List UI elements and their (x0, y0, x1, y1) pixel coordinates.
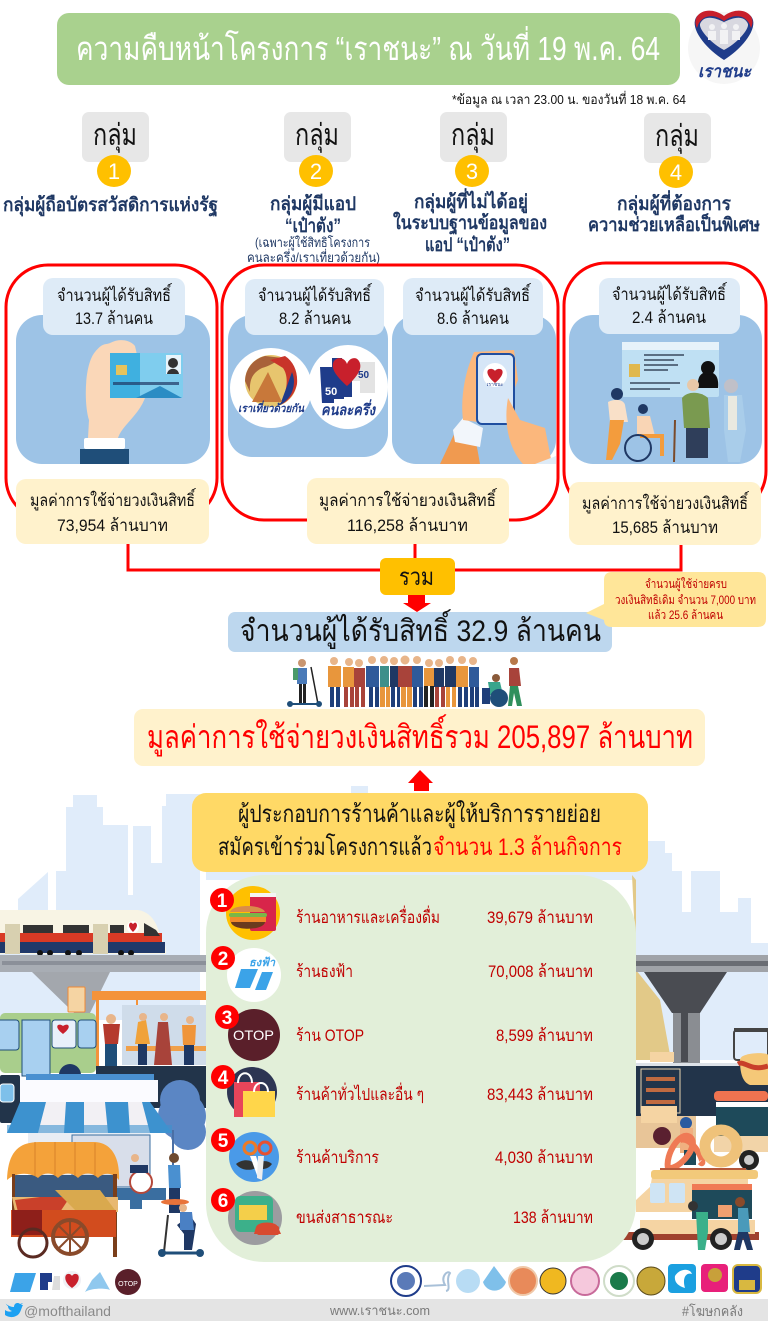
icon: Khon La Khrueng logo: 50 (358, 370, 370, 381)
retail operators box: ผู้ประกอบการร้านค้าและผู้ให้บริการรายย่อย (238, 800, 601, 829)
row 5: services: ร้านค้าบริการ (296, 1148, 379, 1167)
callout: full spenders: จำนวนผู้ใช้จ่ายครบ (645, 577, 727, 592)
group 3 header: 3 (466, 159, 478, 184)
row 1: food and drink: ร้านอาหารและเครื่องดื่ม (296, 905, 440, 927)
row 1: food and drink (210, 886, 593, 940)
group 4 header: กลุ่ม (655, 120, 699, 155)
recipients label (43, 278, 185, 335)
row 4: general stores: ร้านค้าทั่วไปและอื่น ๆ (296, 1082, 424, 1104)
icon: hand holding welfare card (80, 340, 183, 464)
row 3: OTOP: 8,599 ล้านบาท (496, 1026, 593, 1045)
total recipients box: จำนวนผู้ได้รับสิทธิ์ 32.9 ล้านคน (240, 609, 601, 649)
recipients label group 3: จำนวนผู้ได้รับสิทธิ์ (415, 283, 532, 306)
panel: group 4 (564, 263, 766, 545)
recipients label: จำนวนผู้ได้รับสิทธิ์ (57, 283, 173, 306)
illustration: elevated train and track (0, 910, 206, 1013)
spending label (16, 479, 209, 544)
icon: Rao Chana logo: เราชนะ (698, 62, 753, 81)
icon: hand holding phone with app (440, 350, 556, 464)
group 2 header: 2 (310, 159, 322, 184)
connector lines to total (128, 540, 681, 570)
spending label: 116,258 ล้านบาท (347, 516, 468, 535)
spending label: มูลค่าการใช้จ่ายวงเงินสิทธิ์ (30, 488, 197, 511)
group 1 header: กลุ่ม (93, 119, 137, 154)
retail operators box: สมัครเข้าร่วมโครงการแล้ว (218, 833, 432, 861)
row 1: food and drink: 39,679 ล้านบาท (487, 908, 593, 927)
row 6: public transport: 6 (218, 1191, 228, 1212)
row 6: public transport: ขนส่งสาธารณะ (296, 1208, 393, 1227)
spending label: 73,954 ล้านบาท (57, 516, 168, 535)
panel: group 1 (6, 265, 217, 544)
illustration: people and scooter (158, 1153, 204, 1257)
recipients label: 2.4 ล้านคน (632, 308, 706, 327)
city skyline background (0, 786, 768, 1060)
row 3: OTOP (215, 1005, 593, 1061)
sum label: รวม (399, 564, 434, 591)
icon: Rao Tiew Duay Kan logo: เราเที่ยวด้วยกัน (238, 400, 304, 415)
recipients label group 3: 8.6 ล้านคน (437, 309, 509, 328)
retail operators box (192, 793, 648, 872)
footer bar: www.เราชนะ.com (329, 1303, 430, 1318)
group 2 header: “เป๋าตัง” (285, 216, 341, 237)
total recipients box (228, 609, 612, 652)
row 3: OTOP: ร้าน OTOP (296, 1026, 364, 1045)
group 3 header: ในระบบฐานข้อมูลของ (393, 211, 547, 236)
icon: twitter bird (5, 1303, 23, 1317)
logos: programme row: OTOP (118, 1281, 138, 1288)
logos: programme row (10, 1269, 141, 1295)
illustration: bus stop and bus (0, 991, 206, 1108)
row 2: Thong Fah: ธงฟ้า (249, 956, 276, 969)
logos: agency seals (391, 1264, 761, 1296)
row 2: Thong Fah: ร้านธงฟ้า (296, 962, 353, 981)
icon: Khon La Khrueng logo: 50 (325, 386, 337, 398)
group 4 header: 4 (670, 160, 682, 185)
title banner (57, 13, 680, 85)
group 2 header: คนละครึ่ง/เราเที่ยวด้วยกัน) (247, 249, 380, 265)
spending label: มูลค่าการใช้จ่ายวงเงินสิทธิ์ (319, 488, 498, 511)
group 1 header: กลุ่มผู้ถือบัตรสวัสดิการแห่งรัฐ (3, 194, 218, 218)
illustration: food trucks and coffee shop (622, 1028, 768, 1250)
spending label (307, 478, 509, 544)
row 5: services: 4,030 ล้านบาท (495, 1148, 593, 1167)
panel: groups 2 and 3 (222, 265, 558, 544)
icon: Khon La Khrueng logo: คนละครึ่ง (321, 399, 376, 419)
group 2 header: กลุ่มผู้มีแอป (270, 193, 356, 216)
icon: hand holding phone with app: เราชนะ (487, 382, 504, 388)
row 4: general stores: 83,443 ล้านบาท (487, 1085, 593, 1104)
arrow: up to total spending (408, 770, 433, 791)
icon: Rao Tiew Duay Kan logo (230, 348, 312, 428)
spending label: 15,685 ล้านบาท (612, 518, 718, 537)
icon: national ID card and caregivers (606, 342, 746, 462)
row 2: Thong Fah: 70,008 ล้านบาท (488, 962, 593, 981)
recipients label: จำนวนผู้ได้รับสิทธิ์ (612, 282, 728, 305)
data date note: *ข้อมูล ณ เวลา 23.00 น. ของวันที่ 18 พ.ค. 64 (452, 91, 686, 108)
group 2 header: กลุ่ม (295, 119, 339, 154)
group 1 header: 1 (108, 159, 120, 184)
group 2 header: (เฉพาะผู้ใช้สิทธิโครงการ (255, 235, 370, 251)
recipients label group 2: 8.2 ล้านคน (279, 309, 351, 328)
illustration: fruit cart (7, 1142, 119, 1257)
row 5: services: 5 (218, 1131, 229, 1152)
group 3 header: แอป “เป๋าตัง” (425, 235, 510, 256)
arrow: down to total (403, 595, 431, 612)
illustration: store front (0, 1074, 206, 1209)
recipients label (599, 278, 740, 334)
wheelchair user and helper (482, 657, 522, 707)
row 4: general stores: 4 (218, 1068, 229, 1089)
total spending box (134, 709, 705, 766)
row 6: public transport: 138 ล้านบาท (513, 1208, 593, 1227)
row 1: food and drink: 1 (217, 891, 228, 912)
row 4: general stores (211, 1065, 593, 1117)
footer bar: #โฆษกคลัง (682, 1303, 743, 1319)
footer bar (0, 1299, 768, 1321)
row 2: Thong Fah (211, 946, 593, 1002)
row 5: services (211, 1128, 593, 1182)
row 2: Thong Fah: 2 (218, 949, 228, 970)
panel: spending by shop type (206, 875, 636, 1262)
row 6: public transport (211, 1188, 593, 1245)
icon: Rao Chana logo (688, 11, 760, 84)
icon: Khon La Khrueng logo (308, 345, 388, 429)
recipients label group 2 (245, 279, 384, 335)
illustration: right overpass (632, 875, 768, 1063)
group 3 header (393, 112, 547, 256)
retail operators box: จำนวน 1.3 ล้านกิจการ (433, 834, 622, 861)
callout: full spenders (586, 572, 766, 627)
sum label (380, 558, 455, 595)
group 4 header: กลุ่มผู้ที่ต้องการ (617, 190, 732, 216)
group 1 header (3, 112, 218, 218)
scooter rider (287, 659, 322, 707)
spending label (569, 482, 761, 545)
row 3: OTOP: 3 (222, 1008, 232, 1029)
group 3 header: กลุ่มผู้ที่ไม่ได้อยู่ (414, 188, 528, 214)
footer bar: @mofthailand (24, 1303, 111, 1319)
icon: crowd of people (287, 656, 522, 707)
row 3: OTOP: OTOP (233, 1027, 274, 1043)
recipients label group 3 (403, 278, 543, 335)
recipients label: 13.7 ล้านคน (75, 309, 153, 328)
group 3 header: กลุ่ม (451, 119, 495, 154)
recipients label group 2: จำนวนผู้ได้รับสิทธิ์ (258, 283, 373, 306)
group 4 header (588, 113, 760, 236)
group 2 header (247, 112, 380, 265)
callout: full spenders: แล้ว 25.6 ล้านคน (648, 608, 723, 622)
